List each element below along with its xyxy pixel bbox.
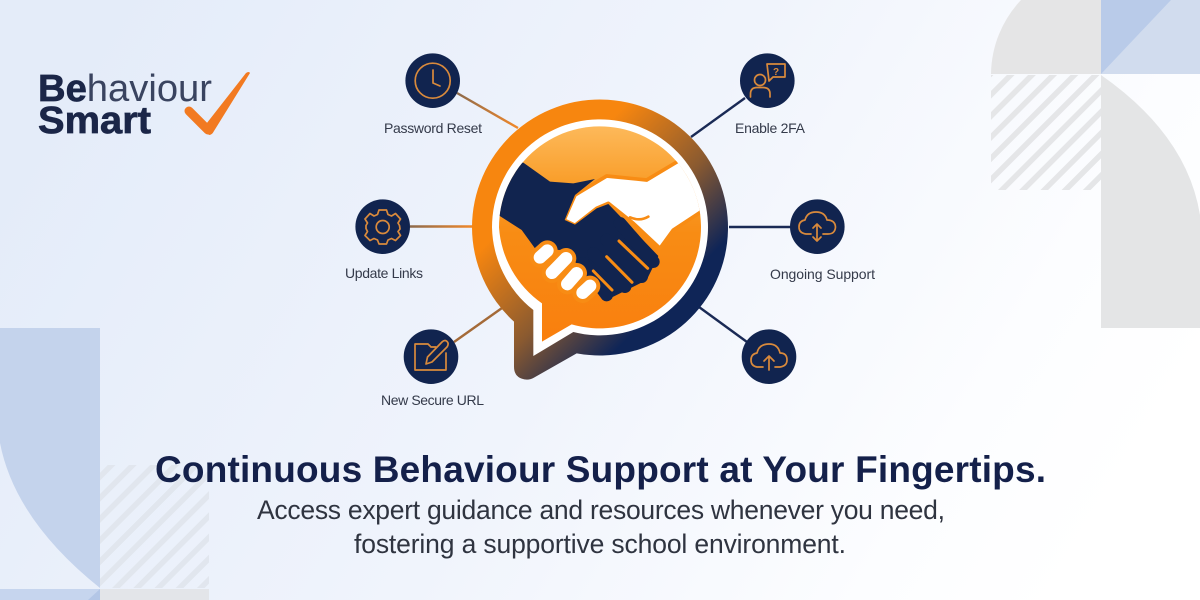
bubble orange disc bbox=[499, 126, 701, 342]
icon: person question node bbox=[740, 53, 795, 108]
white hand bbox=[566, 160, 700, 246]
icon: clock node bbox=[405, 53, 460, 108]
label: Ongoing Support: Ongoing Support bbox=[770, 266, 875, 282]
title: Continuous Behaviour Support at Your Fingertips. bbox=[155, 449, 1046, 490]
logo wordmark line 2: Smart bbox=[38, 100, 151, 142]
connector lines bbox=[410, 93, 791, 342]
icon: edit note node bbox=[404, 329, 458, 384]
label: Password Reset: Password Reset bbox=[384, 120, 482, 136]
subtitle text: fostering a supportive school environment. bbox=[354, 529, 846, 559]
label: Enable 2FA: Enable 2FA bbox=[735, 120, 806, 136]
hand crease bbox=[630, 217, 648, 219]
handshake bbox=[500, 160, 700, 302]
navy hand bbox=[497, 163, 658, 300]
icon: person question node: ? bbox=[773, 67, 779, 78]
bubble outer ring and tail bbox=[472, 99, 728, 380]
label: Update Links: Update Links bbox=[345, 265, 423, 281]
bubble white ring and tail bbox=[492, 119, 708, 356]
decoration: top right geometric shapes bbox=[991, 0, 1200, 328]
subtitle text: Access expert guidance and resources whenever you need, bbox=[257, 495, 945, 525]
icon: cloud upload node bbox=[742, 329, 796, 384]
logo check mark bbox=[189, 72, 250, 135]
logo: Behaviour Smart bbox=[38, 68, 250, 142]
logo wordmark line 1: Behaviour bbox=[38, 68, 212, 110]
label: New Secure URL: New Secure URL bbox=[381, 392, 484, 408]
central speech bubble with handshake bbox=[472, 99, 728, 380]
icon: cloud sync node bbox=[790, 199, 845, 254]
subtitle text bbox=[257, 495, 945, 559]
icon: gear node bbox=[355, 199, 410, 254]
white fingers bbox=[540, 251, 590, 293]
decoration: bottom left geometric shapes bbox=[0, 328, 209, 600]
